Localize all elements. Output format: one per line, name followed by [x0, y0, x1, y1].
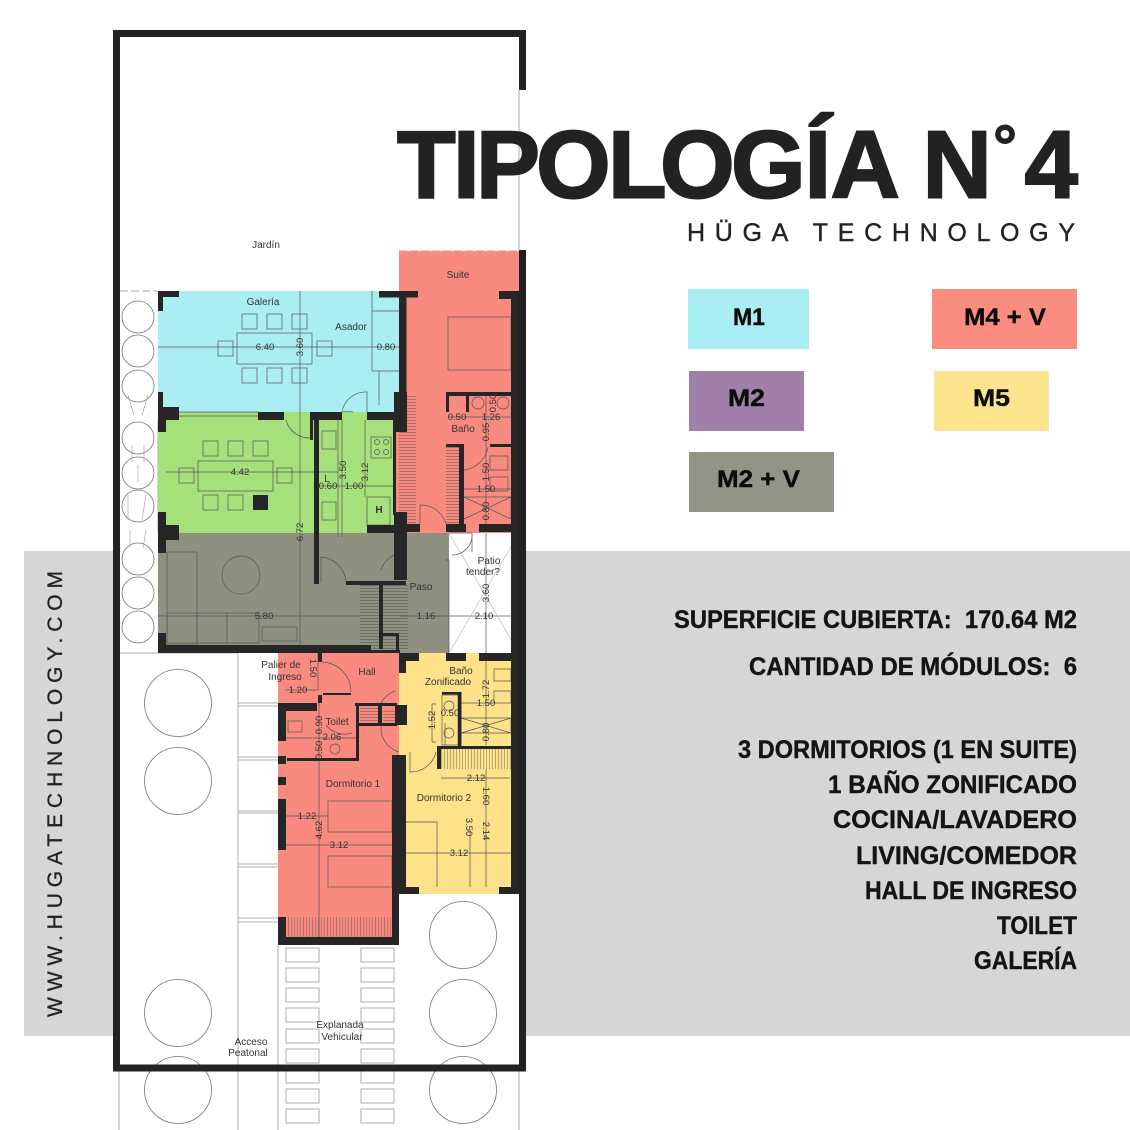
zone: dormitorio 2 and bano zonificado (M5): [399, 653, 511, 894]
zone: living (M2 + V): [158, 533, 449, 653]
room labels and dimensions: Baño: [449, 666, 473, 677]
room labels and dimensions: Hall: [358, 667, 376, 678]
title: TIPOLOGÍA N: [397, 112, 992, 218]
room labels and dimensions: 0.50: [441, 708, 459, 719]
room labels and dimensions: 0.60: [319, 481, 337, 492]
legend: M2 + V: M2 + V: [717, 466, 800, 493]
room labels and dimensions: tender?: [466, 567, 500, 578]
legend: M5: M5: [973, 385, 1010, 412]
room labels and dimensions: 1.22: [298, 811, 316, 822]
room list: HALL DE INGRESO: [865, 877, 1077, 905]
title: °: [993, 113, 1017, 180]
room labels and dimensions: Paso: [410, 582, 433, 593]
room labels and dimensions: 0.90: [314, 716, 325, 734]
legend: M2: M2: [728, 385, 765, 412]
zone: suite (M4 + V): [395, 251, 519, 533]
room labels and dimensions: 1.50: [481, 463, 492, 481]
specifications text: [674, 606, 1077, 681]
room labels and dimensions: 3.50: [463, 818, 474, 836]
room labels and dimensions: 5.80: [255, 611, 273, 622]
room labels and dimensions: 6.72: [295, 523, 306, 541]
room labels and dimensions: Asador: [335, 322, 368, 333]
room labels and dimensions: 0.80: [481, 723, 492, 741]
room labels and dimensions: 0.80: [377, 342, 395, 353]
room labels and dimensions: 3.12: [360, 463, 371, 481]
walls: [158, 291, 519, 945]
legend: M4 + V: M4 + V: [964, 304, 1046, 331]
legend: M2: [689, 371, 804, 431]
room labels and dimensions: 1.50: [477, 698, 495, 709]
legend: M5: [934, 371, 1049, 431]
room labels and dimensions: 0.50: [448, 412, 466, 423]
zone: galeria (M1): [158, 291, 400, 412]
specifications text: CANTIDAD DE MÓDULOS: 6: [749, 651, 1077, 681]
stairs: [286, 395, 511, 937]
room labels and dimensions: 3.60: [295, 338, 306, 356]
room labels and dimensions: Jardín: [252, 240, 280, 251]
room labels and dimensions: 0.95: [481, 423, 492, 441]
subtitle: HÜGA TECHNOLOGY: [687, 219, 1075, 247]
legend: M4 + V: [932, 289, 1077, 349]
room labels and dimensions: 2.14: [480, 822, 491, 840]
room labels and dimensions: Ingreso: [268, 672, 302, 683]
legend: M1: [688, 289, 809, 349]
room labels and dimensions: Toilet: [325, 717, 349, 728]
room labels and dimensions: 3.60: [481, 584, 492, 602]
room labels and dimensions: 1.50: [477, 484, 495, 495]
room labels and dimensions: 2.06: [323, 732, 341, 743]
title: 4: [1024, 112, 1078, 218]
room list: TOILET: [997, 912, 1077, 940]
specifications text: SUPERFICIE CUBIERTA: 170.64 M2: [674, 606, 1077, 634]
furniture and dimension lines: [158, 291, 519, 937]
room labels and dimensions: H: [375, 505, 383, 516]
legend: M2 + V: [689, 452, 834, 512]
room labels and dimensions: Zonificado: [425, 677, 472, 688]
black site frame: [116, 34, 522, 1068]
room list: 3 DORMITORIOS (1 EN SUITE): [738, 736, 1077, 764]
room labels and dimensions: Galería: [247, 297, 280, 308]
room labels and dimensions: 4.62: [314, 821, 325, 839]
room labels and dimensions: 1.26: [482, 412, 500, 423]
room labels and dimensions: 3.50: [338, 461, 349, 479]
room list: [738, 736, 1077, 975]
room labels and dimensions: Vehicular: [321, 1032, 363, 1043]
room labels and dimensions: 1.16: [417, 611, 435, 622]
room labels and dimensions: 1.00: [345, 481, 363, 492]
legend: M1: M1: [733, 304, 765, 331]
room labels and dimensions: 1.60: [480, 787, 491, 805]
room labels and dimensions: 1.52: [427, 711, 438, 729]
trees: [122, 301, 496, 1124]
room labels and dimensions: 1.72: [481, 680, 492, 698]
room labels and dimensions: 1.50: [307, 659, 318, 677]
website vertical text: WWW.HUGATECHNOLOGY.COM: [44, 571, 67, 1017]
floor plan: [119, 90, 519, 1130]
room labels and dimensions: Dormitorio 1: [326, 779, 381, 790]
room labels and dimensions: Peatonal: [228, 1048, 268, 1059]
room labels and dimensions: 4.42: [231, 467, 249, 478]
zone: cocina comedor (M2): [158, 412, 395, 533]
room list: GALERÍA: [974, 946, 1077, 975]
room labels and dimensions: Explanada: [316, 1020, 364, 1031]
room labels and dimensions: 2.12: [467, 773, 485, 784]
room labels and dimensions: 2.10: [475, 611, 493, 622]
room labels and dimensions: 3.12: [450, 848, 468, 859]
grey background band: [24, 551, 1130, 1036]
room labels and dimensions: 3.12: [330, 840, 348, 851]
room labels and dimensions: Baño: [451, 424, 475, 435]
room labels and dimensions: Palier de: [261, 660, 301, 671]
zone: hall and dormitorio 1: [278, 653, 399, 937]
room labels and dimensions: 6.40: [256, 342, 274, 353]
room list: 1 BAÑO ZONIFICADO: [828, 769, 1077, 799]
room labels and dimensions: 0.80: [481, 502, 492, 520]
room list: COCINA/LAVADERO: [833, 806, 1077, 834]
room labels and dimensions: 0.50: [488, 394, 499, 412]
site lines and pavers: [119, 90, 519, 1130]
room labels and dimensions: [228, 240, 501, 1059]
room labels and dimensions: L: [324, 474, 330, 485]
room list: LIVING/COMEDOR: [856, 842, 1077, 870]
room labels and dimensions: 1.20: [289, 685, 307, 696]
legend: [688, 289, 1077, 512]
room labels and dimensions: Dormitorio 2: [417, 793, 472, 804]
room labels and dimensions: Acceso: [235, 1037, 268, 1048]
room labels and dimensions: 0.50: [314, 741, 325, 759]
room labels and dimensions: Patio: [478, 556, 501, 567]
room labels and dimensions: Suite: [447, 270, 470, 281]
